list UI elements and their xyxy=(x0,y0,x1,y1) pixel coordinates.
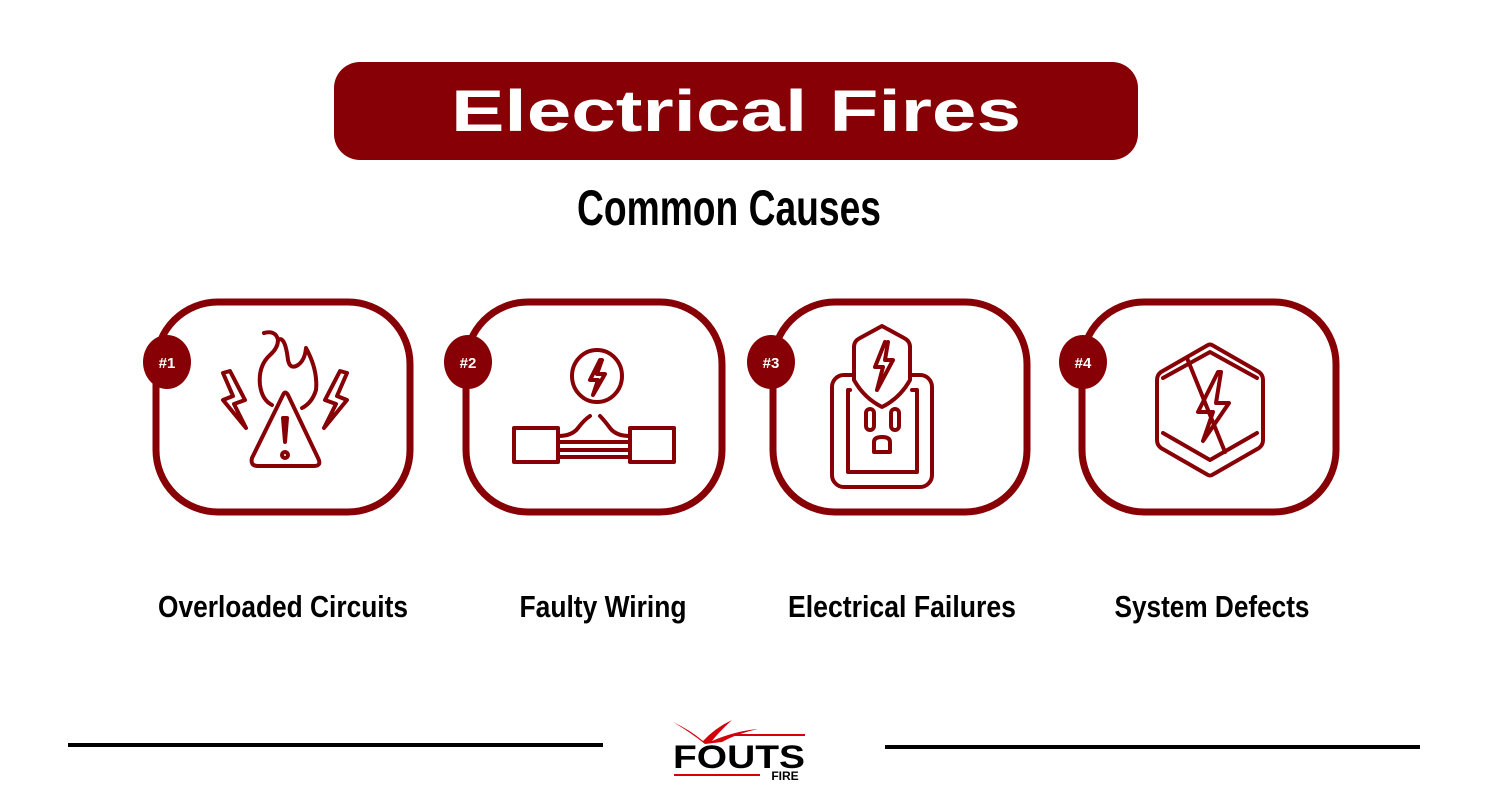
badge #3: #3 xyxy=(763,355,779,372)
card 2: faulty wiring xyxy=(444,302,722,512)
label: faulty wiring: Faulty Wiring xyxy=(520,589,686,624)
badge #2: #2 xyxy=(460,355,476,372)
icon: broken wire xyxy=(514,350,674,462)
label: system defects: System Defects xyxy=(1114,589,1310,624)
icon: outlet with shield xyxy=(832,326,932,487)
label: overloaded circuits: Overloaded Circuits xyxy=(158,589,408,624)
badge #1: #1 xyxy=(159,355,175,372)
badge #4 xyxy=(1059,335,1107,389)
icon: fire warning xyxy=(223,332,347,466)
logo: fouts fire: FIRE xyxy=(771,769,799,783)
badge #3 xyxy=(747,335,795,389)
badge #4: #4 xyxy=(1075,355,1092,372)
icon: hexagon crossed bolt xyxy=(1157,344,1263,476)
label: electrical failures: Electrical Failures xyxy=(788,589,1016,624)
card 4: system defects xyxy=(1059,302,1336,512)
badge #2 xyxy=(444,335,492,389)
title banner: Electrical Fires xyxy=(451,79,1021,144)
title banner xyxy=(334,62,1138,160)
card 1: overloaded circuits xyxy=(143,302,410,512)
logo: fouts fire xyxy=(673,720,805,783)
logo: fouts fire: FOUTS xyxy=(673,739,805,775)
card 3: electrical failures xyxy=(747,302,1027,512)
badge #1 xyxy=(143,335,191,389)
subtitle: Common Causes xyxy=(577,180,881,236)
